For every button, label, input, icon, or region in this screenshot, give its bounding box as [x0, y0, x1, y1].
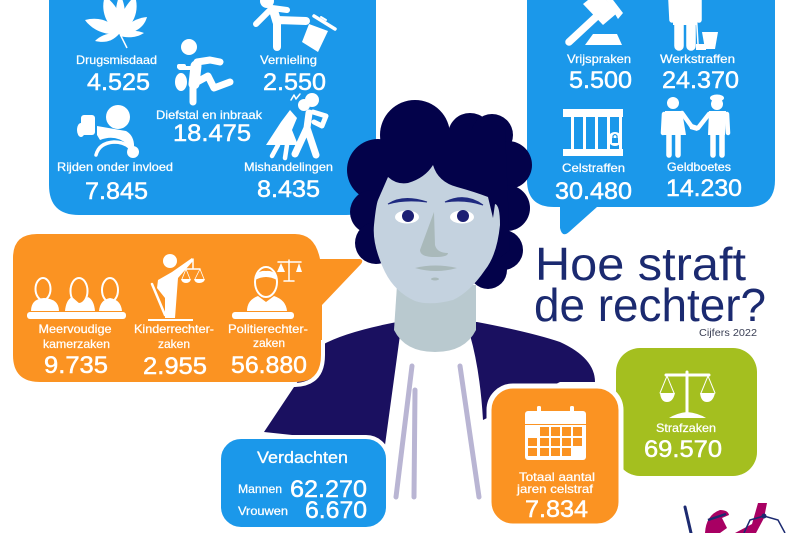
- number: werkstraffen: 24.370: [662, 67, 739, 94]
- panel: criminal cases: [616, 348, 757, 476]
- number: drugsmisdaad: 4.525: [87, 69, 150, 96]
- icon: gavel: [569, 0, 623, 45]
- icon: calendar: [525, 406, 586, 460]
- label: Geldboetes: Geldboetes: [667, 160, 731, 174]
- number: geldboetes: 14.230: [666, 175, 742, 202]
- icon: scales: [660, 372, 715, 418]
- number: mannen: 62.270: [290, 476, 367, 503]
- number: politierechterzaken: 56.880: [231, 352, 307, 379]
- eyes: [395, 210, 419, 224]
- number: strafzaken: 69.570: [644, 436, 722, 463]
- label: Politierechterzaken: Politierechter-: [228, 322, 308, 336]
- label: Kinderrechterzaken: Kinderrechter-: [134, 322, 214, 336]
- panel: suspects: [219, 437, 388, 529]
- label: Celstraffen: Celstraffen: [562, 161, 625, 175]
- number: diefstal en inbraak: 18.475: [173, 120, 251, 147]
- heading: Verdachten: Verdachten: [257, 448, 348, 467]
- icon: police judge: [232, 260, 302, 319]
- icon: two people fighting: [266, 93, 326, 158]
- label: Vrijspraken: Vrijspraken: [567, 52, 631, 66]
- number: mishandelingen: 8.435: [257, 176, 320, 203]
- subtitle: Cijfers 2022: Cijfers 2022: [699, 327, 757, 339]
- number: vrijspraken: 5.500: [569, 67, 632, 94]
- icon: person kicking bin: [256, 0, 335, 52]
- title: [534, 238, 766, 331]
- jabot lines: [396, 366, 479, 497]
- label: Strafzaken: Strafzaken: [656, 421, 716, 435]
- hair: [347, 100, 532, 289]
- panel: verdicts: [527, 0, 775, 234]
- eyebrows: [388, 198, 427, 204]
- number: vernieling: 2.550: [263, 69, 326, 96]
- neck: [394, 285, 476, 352]
- title: Hoe straft: [535, 238, 746, 290]
- label: Werkstraffen: Werkstraffen: [660, 52, 735, 66]
- icon: three judges at bench: [27, 278, 126, 319]
- panel: total prison years: [489, 386, 621, 526]
- number: celstraffen: 30.480: [555, 178, 632, 205]
- illustration: judge: [264, 100, 595, 500]
- label: Kinderrechterzaken: [134, 322, 214, 351]
- nose shade: [420, 212, 448, 257]
- icon: lady justice: [148, 254, 205, 321]
- icon: thief running: [175, 39, 230, 102]
- robe: [264, 322, 595, 500]
- label: Vrouwen: Vrouwen: [238, 504, 288, 518]
- label: Mishandelingen: Mishandelingen: [244, 160, 333, 174]
- label: Totaal aantal jaren celstraf: [516, 470, 595, 496]
- label: Mannen: Mannen: [238, 482, 282, 496]
- panel: court types: [13, 234, 362, 385]
- icon: driver under influence: [77, 105, 139, 158]
- label: Totaal aantal jaren celstraf: jaren celstraf: [516, 482, 594, 496]
- number: vrouwen: 6.670: [305, 497, 367, 524]
- number: total prison years: 7.834: [525, 496, 588, 523]
- icon: prison bars with lock: [563, 109, 623, 156]
- label: Politierechterzaken: [228, 322, 308, 350]
- icon: two people shaking hands: [663, 94, 728, 155]
- label: Meervoudige kamerzaken: kamerzaken: [43, 337, 110, 351]
- label: Diefstal en inbraak: Diefstal en inbraak: [156, 108, 263, 122]
- label: Politierechterzaken: zaken: [253, 336, 285, 350]
- label: Drugsmisdaad: Drugsmisdaad: [76, 53, 157, 67]
- label: Totaal aantal jaren celstraf: Totaal aantal: [519, 470, 595, 484]
- label: Rijden onder invloed: Rijden onder invloed: [57, 160, 173, 174]
- jabot: [378, 335, 490, 500]
- number: meervoudige kamerzaken: 9.735: [44, 352, 108, 379]
- number: rijden onder invloed: 7.845: [85, 178, 148, 205]
- label: Meervoudige kamerzaken: [38, 322, 112, 351]
- title: de rechter?: [534, 279, 766, 331]
- mouth: [415, 266, 457, 271]
- label: Meervoudige kamerzaken: Meervoudige: [38, 322, 112, 336]
- number: kinderrechterzaken: 2.955: [143, 353, 207, 380]
- icon: cannabis leaf: [85, 0, 147, 48]
- panel: crime types: [49, 0, 376, 215]
- icon: worker with bucket: [671, 0, 718, 50]
- label: Kinderrechterzaken: zaken: [158, 337, 190, 351]
- face: [374, 165, 500, 303]
- label: Vernieling: Vernieling: [260, 53, 317, 67]
- illustration: lady justice logo: [685, 503, 785, 533]
